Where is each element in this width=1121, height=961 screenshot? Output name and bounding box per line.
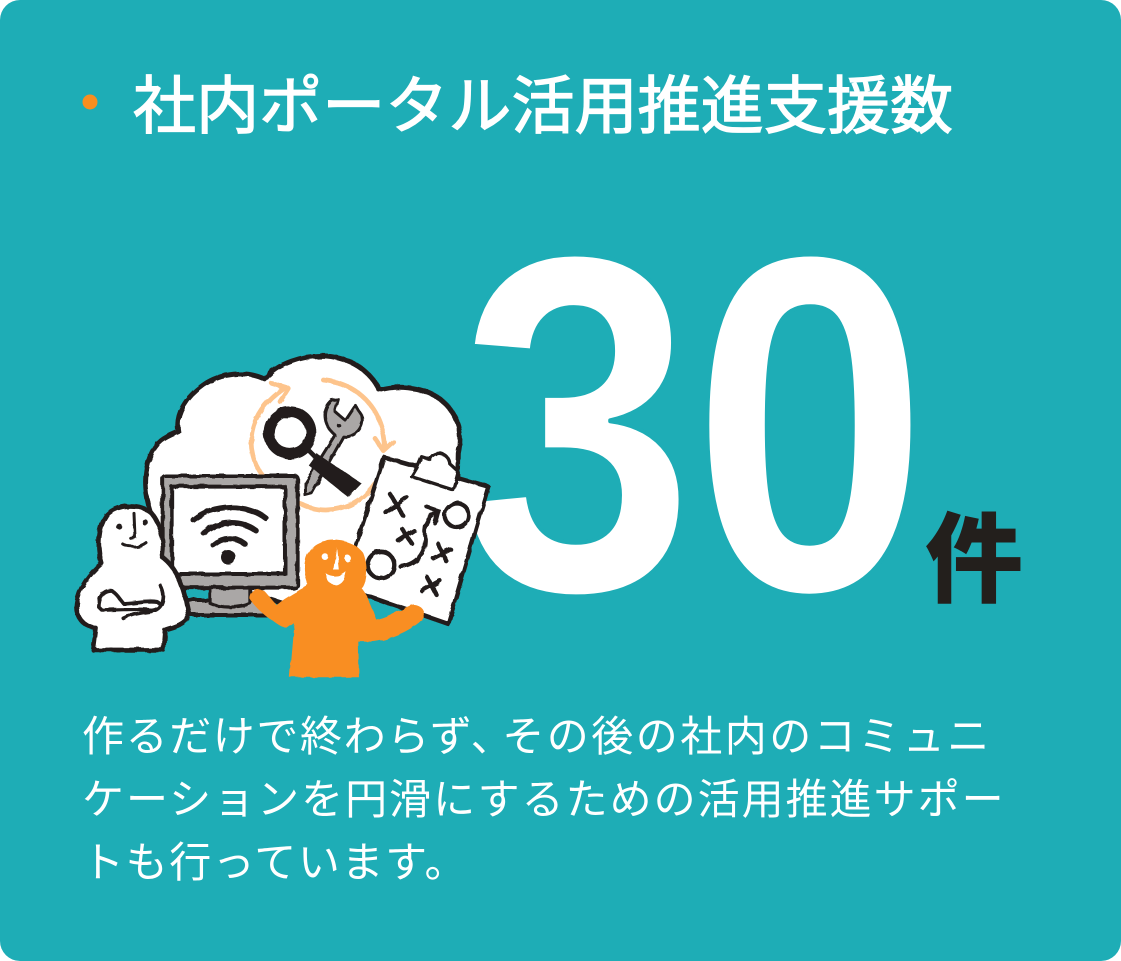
description text: 作るだけで終わらず、その後の社内のコミュニ bbox=[82, 713, 992, 760]
description text: ケーションを円滑にするための活用推進サポー bbox=[82, 776, 1006, 823]
computer monitor bbox=[163, 476, 298, 615]
heading: 社内ポータル活用推進支援数 bbox=[133, 72, 953, 142]
wrench bbox=[305, 399, 362, 495]
person: white with crossed arms bbox=[76, 506, 188, 650]
description text bbox=[82, 713, 1006, 886]
cloud bbox=[146, 356, 460, 607]
circular arrows bbox=[251, 380, 393, 510]
description text: トも行っています。 bbox=[82, 839, 468, 886]
big number: 30 bbox=[458, 154, 930, 694]
icon: orange bullet bbox=[82, 94, 98, 110]
big number: 30: 3 bbox=[458, 155, 696, 694]
magnifying glass bbox=[269, 412, 362, 497]
illustration bbox=[76, 356, 488, 677]
big number: 30: 0 bbox=[690, 154, 930, 693]
clipboard bbox=[353, 453, 488, 624]
person: orange presenter bbox=[249, 540, 424, 677]
unit: 件: 件 bbox=[925, 505, 1023, 615]
wifi symbol bbox=[193, 507, 266, 545]
